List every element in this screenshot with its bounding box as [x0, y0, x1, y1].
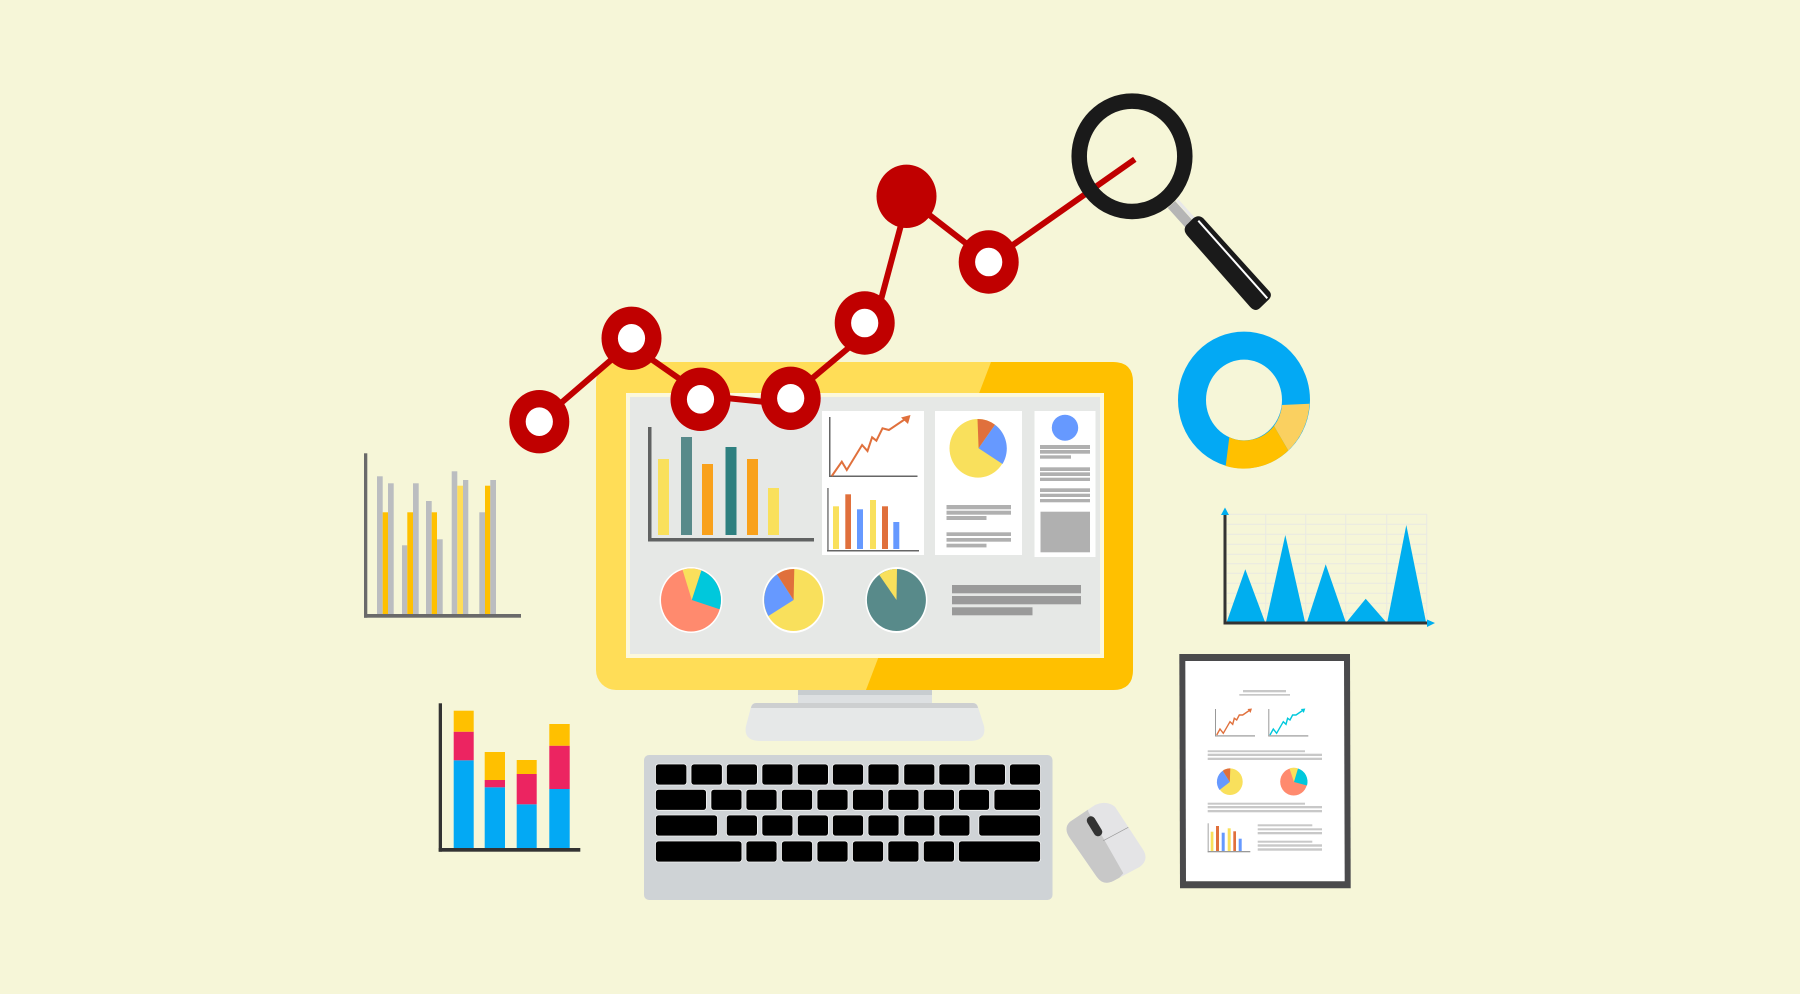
screen text lines: [952, 585, 1081, 615]
red trend line with markers: [509, 159, 1135, 453]
area chart: [1221, 508, 1435, 627]
marker 2: [602, 307, 662, 370]
chart grid: [1227, 514, 1427, 622]
document line chart: teal: [1268, 708, 1308, 736]
card: pie chart with text: [935, 411, 1022, 555]
document text block 1: [1208, 750, 1322, 760]
monitor stand: [746, 690, 984, 741]
marker 3: [670, 368, 730, 431]
marker 7: [959, 230, 1019, 294]
icon: magnifying glass: [1079, 101, 1271, 310]
screen: [626, 393, 1104, 658]
document title lines: [1239, 690, 1290, 696]
document line chart: orange: [1215, 708, 1255, 736]
pie chart: salmon: [660, 567, 722, 633]
document pie: salmon: [1280, 768, 1308, 796]
document pie: yellow: [1217, 768, 1243, 795]
large bar chart: [648, 427, 814, 542]
report document: [1179, 654, 1351, 888]
document text block 3: [1258, 824, 1322, 851]
marker 4: [761, 367, 821, 430]
icon: mouse: [1066, 803, 1146, 883]
marker 5: [835, 291, 895, 355]
document text block 2: [1208, 803, 1322, 812]
keyboard: [644, 755, 1052, 900]
card: line and bar charts: [822, 411, 924, 555]
card: profile report: [1034, 411, 1096, 557]
area peaks: [1227, 525, 1426, 622]
monitor: [596, 362, 1133, 741]
stacked bar chart: [439, 703, 580, 852]
pie chart: teal: [865, 567, 927, 633]
marker 1: [509, 390, 569, 453]
donut chart: [1192, 346, 1310, 469]
keyboard keys: [656, 764, 1040, 862]
grouped bar chart: [364, 453, 521, 618]
marker 6: solid peak: [876, 165, 936, 228]
pie chart: yellow: [762, 567, 824, 633]
document bar chart: [1208, 823, 1250, 852]
axes: [1221, 508, 1435, 627]
trend line: [555, 159, 1135, 408]
monitor frame: [596, 362, 1133, 690]
